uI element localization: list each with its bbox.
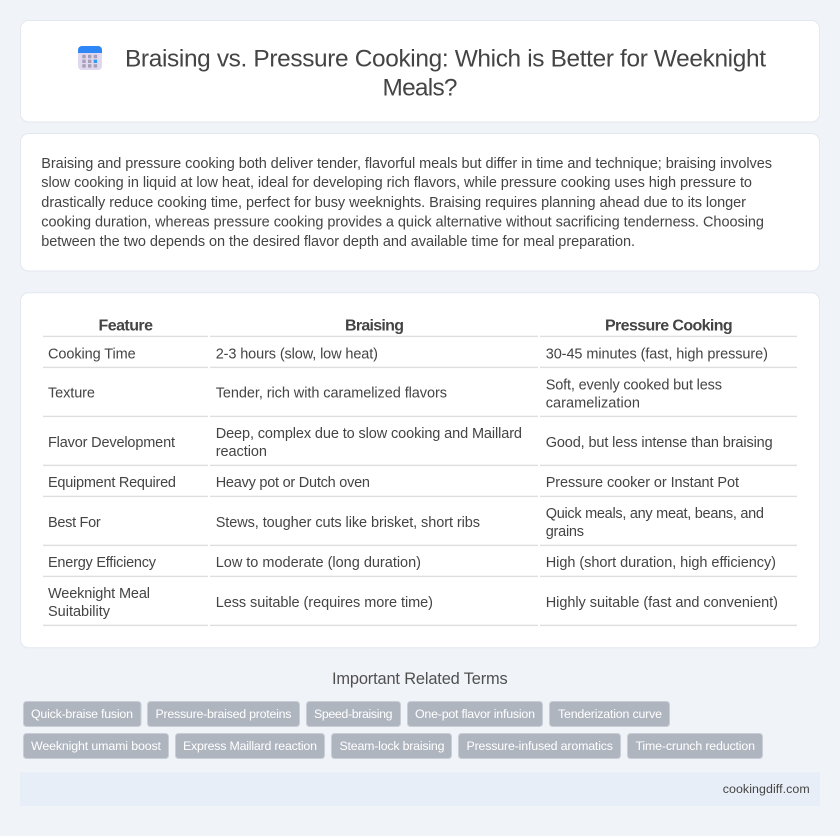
tag: quick-braise fusion: Quick-braise fusion [31, 707, 133, 721]
icon: calendar [78, 46, 102, 70]
tag: pressure-braised proteins: Pressure-braised proteins [156, 707, 292, 721]
row: energy efficiency: Low to moderate (long duration) [216, 555, 421, 571]
row: texture: caramelization [546, 395, 640, 411]
row: cooking time [48, 346, 768, 362]
tag: weeknight umami boost: Weeknight umami boost [31, 739, 162, 753]
row: flavor development: Good, but less intense than braising [546, 435, 773, 451]
row: energy efficiency [48, 555, 776, 571]
row: weeknight meal suitability: Less suitable (requires more time) [216, 595, 433, 611]
text block: summary paragraph: slow cooking in liquid at low heat, ideal for developing rich flavors, while pressure cooking uses high pressure to [41, 175, 752, 191]
tag: steam-lock braising: Steam-lock braising [340, 739, 445, 753]
text block: summary paragraph [41, 156, 772, 250]
tag: tenderization curve: Tenderization curve [558, 707, 662, 721]
row: texture: Tender, rich with caramelized flavors [216, 386, 447, 402]
row: texture [48, 377, 722, 411]
title: Braising vs. Pressure Cooking: Which is Better for Weeknight [125, 46, 766, 72]
title: Meals? [382, 74, 458, 102]
row: cooking time: 30-45 minutes (fast, high pressure) [546, 346, 768, 362]
tag: pressure-braised proteins [148, 702, 300, 726]
row: weeknight meal suitability: Suitability [48, 604, 111, 620]
table header row: Pressure Cooking [605, 318, 733, 335]
tag: one-pot flavor infusion: One-pot flavor infusion [415, 707, 535, 721]
tag: quick-braise fusion [24, 702, 141, 726]
tag: weeknight umami boost [24, 734, 168, 758]
text block: summary paragraph: cooking duration, whereas pressure cooking provides a quick alternative without sacrificing tenderness. Choosing [41, 214, 764, 230]
row: flavor development: reaction [216, 444, 267, 460]
row: equipment required: Equipment Required [48, 475, 176, 491]
tag: express maillard reaction [176, 734, 324, 758]
row: texture: Texture [48, 386, 95, 402]
panel: header [20, 20, 820, 122]
row: best for: Quick meals, any meat, beans, and [546, 506, 764, 522]
footer site name: cookingdiff.com [723, 782, 810, 796]
tag: tenderization curve [550, 702, 670, 726]
row: texture: Soft, evenly cooked but less [546, 377, 722, 393]
row: cooking time: 2-3 hours (slow, low heat) [216, 346, 378, 362]
table header row: Braising [345, 318, 404, 335]
panel: comparison table [20, 293, 820, 648]
row: cooking time: Cooking Time [48, 346, 136, 362]
row: flavor development: Flavor Development [48, 435, 175, 451]
row: equipment required: Heavy pot or Dutch oven [216, 475, 370, 491]
heading: important related terms: Important Related Terms [332, 670, 508, 688]
row: best for: Stews, tougher cuts like brisket, short ribs [216, 515, 480, 531]
tag: time-crunch reduction: Time-crunch reduction [636, 739, 755, 753]
row: flavor development: Deep, complex due to slow cooking and Maillard [216, 426, 522, 442]
tag: express maillard reaction: Express Maillard reaction [183, 739, 317, 753]
row: weeknight meal suitability: Weeknight Meal [48, 586, 150, 602]
table header row: Feature [98, 318, 153, 335]
row: best for: Best For [48, 515, 101, 531]
text block: summary paragraph: drastically reduce cooking time, perfect for busy weeknights. Braising requires planning ahead due to its longer [41, 195, 746, 211]
row: equipment required [48, 475, 739, 491]
row: weeknight meal suitability: Highly suitable (fast and convenient) [546, 595, 778, 611]
row: equipment required: Pressure cooker or Instant Pot [546, 475, 739, 491]
tag: steam-lock braising [332, 734, 452, 758]
text block: summary paragraph: Braising and pressure cooking both deliver tender, flavorful meals but differ in time and technique; braising involves [41, 156, 772, 172]
row: best for: grains [546, 524, 584, 540]
tag: speed-braising [306, 702, 400, 726]
row: energy efficiency: High (short duration, high efficiency) [546, 555, 776, 571]
panel: summary text [20, 134, 820, 271]
footer [20, 772, 820, 806]
row: flavor development [48, 426, 773, 460]
tag: time-crunch reduction [628, 734, 762, 758]
tag: pressure-infused aromatics [458, 734, 620, 758]
text block: summary paragraph: between the two depends on the desired flavor depth and available time for meal preparation. [41, 234, 635, 250]
row: weeknight meal suitability [48, 586, 778, 620]
table header row [98, 318, 733, 335]
row: energy efficiency: Energy Efficiency [48, 555, 157, 571]
tag: pressure-infused aromatics: Pressure-infused aromatics [466, 739, 613, 753]
row: best for [48, 506, 764, 540]
title [125, 46, 766, 102]
tag list: related terms [24, 702, 762, 758]
tag: speed-braising: Speed-braising [314, 707, 393, 721]
tag: one-pot flavor infusion [408, 702, 542, 726]
